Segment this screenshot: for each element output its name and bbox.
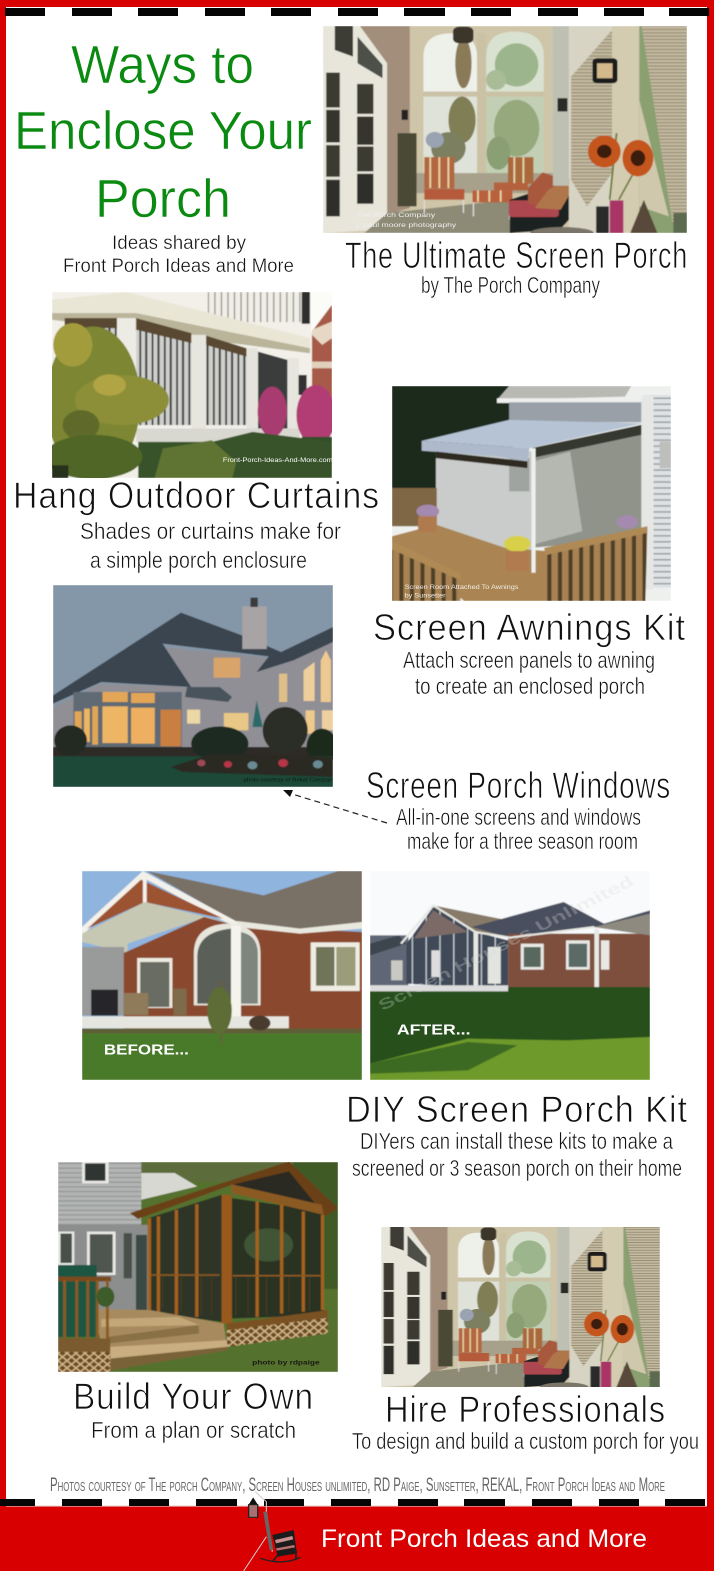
heading: screen porch windows	[366, 765, 671, 854]
photo: build your own: photo by rdpaige	[252, 1359, 320, 1366]
title: Ways to	[71, 35, 254, 95]
footer band	[0, 1505, 714, 1571]
photo: build your own	[58, 1161, 338, 1372]
heading: diy screen porch kit: DIY Screen Porch Kit	[346, 1089, 688, 1130]
heading: screen porch windows: make for a three season room	[407, 828, 638, 854]
photo: after: AFTER...	[397, 1022, 470, 1038]
photo: after: Screen Houses Unlimited	[375, 872, 637, 1014]
arrow to windows photo	[283, 790, 387, 823]
photo: ultimate screen porch: The Porch Company	[356, 211, 435, 219]
heading: screen awnings kit: Attach screen panels to awning	[403, 647, 655, 673]
heading: diy screen porch kit	[346, 1089, 688, 1181]
heading: hang outdoor curtains: a simple porch enclosure	[90, 547, 307, 573]
subtitle: ideas shared by	[63, 233, 294, 277]
heading: hang outdoor curtains: Shades or curtains make for	[80, 518, 341, 544]
bottom dashed border	[0, 1499, 705, 1506]
heading: hire professionals	[352, 1389, 699, 1454]
heading: screen porch windows: All-in-one screens and windows	[396, 804, 641, 830]
photo: before: BEFORE...	[104, 1042, 189, 1058]
photo: screen awning: Screen Room Attached To Awnings	[405, 585, 519, 591]
subtitle: ideas shared by: Front Porch Ideas and More	[63, 256, 294, 277]
photo: outdoor curtains: Front-Porch-Ideas-And-More.com	[223, 457, 333, 464]
heading: screen awnings kit	[373, 607, 686, 699]
heading: build your own: From a plan or scratch	[91, 1417, 296, 1443]
photo: before	[82, 871, 362, 1080]
photo: screen awning: by Sunsetter	[405, 593, 446, 599]
heading: build your own: Build Your Own	[73, 1376, 314, 1417]
photo: house with porch windows	[53, 585, 337, 787]
photo: ultimate screen porch	[323, 26, 687, 239]
heading: screen awnings kit: to create an enclosed porch	[415, 673, 645, 699]
title: Porch	[95, 169, 231, 229]
photo: hire professionals porch	[381, 1227, 660, 1392]
heading: hang outdoor curtains: Hang Outdoor Curtains	[13, 475, 380, 516]
photo: after	[370, 871, 650, 1080]
photo: screen awning	[392, 386, 671, 601]
photo: house with porch windows: photo courtesy of Rekal Company	[243, 778, 336, 783]
title: Enclose Your	[14, 101, 312, 161]
heading: screen awnings kit: Screen Awnings Kit	[373, 607, 686, 648]
heading: the ultimate screen porch	[345, 235, 688, 298]
photo: outdoor curtains	[44, 292, 336, 479]
photo: ultimate screen porch: j. paul moore photography	[355, 221, 456, 229]
heading: hire professionals: Hire Professionals	[385, 1389, 666, 1430]
heading: the ultimate screen porch: by The Porch Company	[421, 272, 600, 298]
footer site name: Front Porch Ideas and More	[321, 1525, 647, 1553]
heading: build your own	[73, 1376, 314, 1443]
heading: hang outdoor curtains	[13, 475, 380, 573]
title	[14, 35, 312, 229]
top dashed border	[5, 8, 709, 16]
icon: lantern and rocking chair	[244, 1492, 301, 1571]
subtitle: ideas shared by: Ideas shared by	[112, 233, 246, 254]
